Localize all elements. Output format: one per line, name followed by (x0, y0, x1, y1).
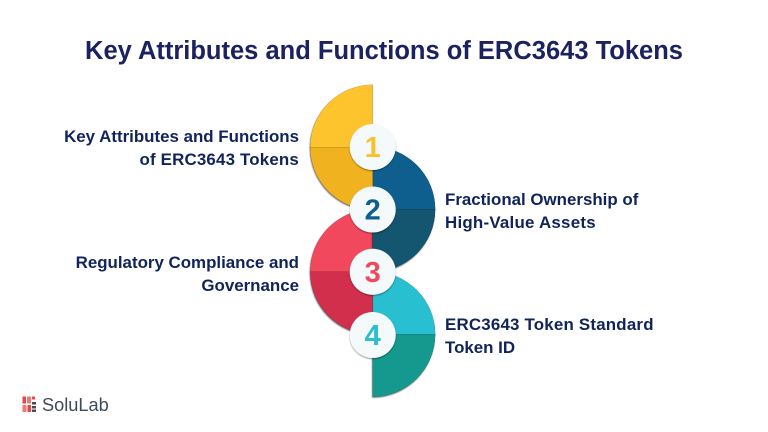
text: item 4 (445, 315, 654, 356)
title: Key Attributes and Functions of ERC3643 Tokens (85, 37, 683, 65)
text: item 2: High-Value Assets (445, 212, 596, 232)
badge 2 (350, 186, 396, 232)
segment 1: yellow half disc (310, 85, 373, 210)
badge 1 (350, 124, 396, 170)
logo: SoluLab (22, 395, 109, 415)
text: item 2 (445, 190, 638, 232)
text: item 3 (76, 253, 299, 294)
badge 4: 4 (365, 320, 381, 352)
text: item 2: Fractional Ownership of (445, 190, 638, 209)
text: item 1: of ERC3643 Tokens (139, 150, 299, 168)
badge 2: 2 (365, 194, 381, 226)
segment 4: teal half disc (373, 272, 435, 397)
segment 2: blue half disc (373, 147, 435, 272)
text: item 4: ERC3643 Token Standard (445, 315, 654, 334)
segment 3: red half disc (310, 209, 373, 334)
badge 4 (350, 312, 396, 358)
text: item 3: Regulatory Compliance and (76, 253, 299, 272)
logo wordmark: SoluLab (42, 395, 109, 415)
icon: logo mark (22, 396, 36, 412)
badge 3 (350, 249, 396, 295)
badge 1: 1 (365, 132, 381, 164)
text: item 1: Key Attributes and Functions (64, 127, 299, 146)
text: item 3: Governance (201, 276, 299, 294)
badge 3: 3 (365, 257, 381, 289)
text: item 1 (64, 127, 299, 168)
text: item 4: Token ID (445, 338, 515, 356)
